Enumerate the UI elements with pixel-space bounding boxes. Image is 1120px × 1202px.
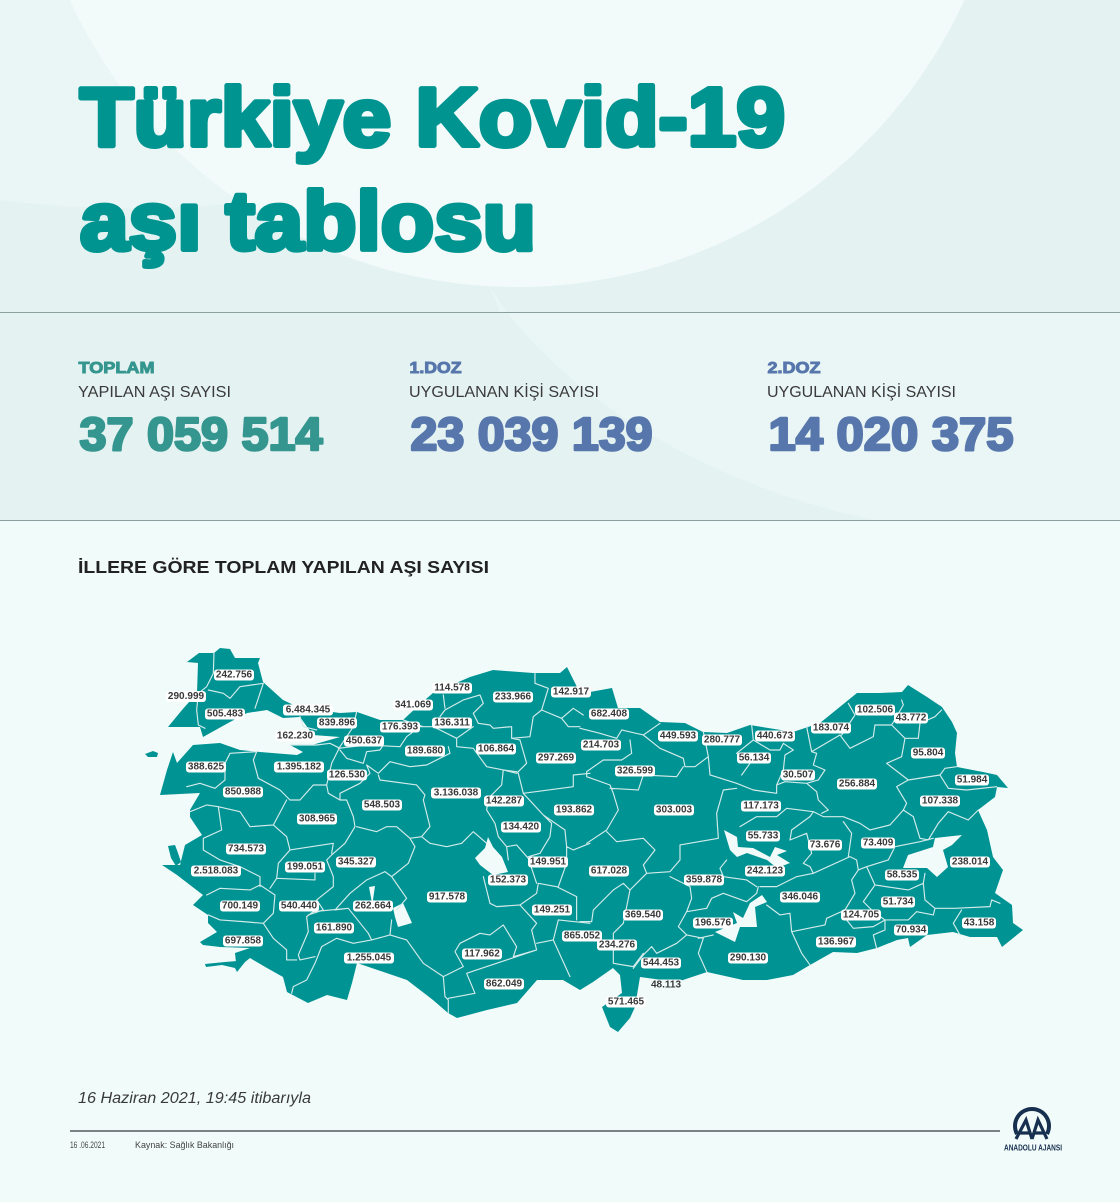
value: 114.578: 114.578 (434, 682, 470, 694)
stat: 1. doz (409, 360, 652, 460)
value: 280.777: 280.777 (704, 734, 741, 746)
value: 117.173: 117.173 (743, 800, 779, 812)
stat: 2. doz: UYGULANAN KİŞİ SAYISI (767, 383, 956, 401)
value: 117.962: 117.962 (464, 948, 500, 960)
value: 346.046: 346.046 (782, 892, 819, 902)
value: 571.465: 571.465 (608, 996, 645, 1008)
logo: Anadolu Ajansı (1004, 1107, 1062, 1152)
value: 55.733: 55.733 (748, 830, 779, 842)
divider: upper (0, 312, 1120, 313)
value: 369.540: 369.540 (625, 910, 662, 920)
value: 440.673: 440.673 (757, 730, 794, 742)
province value labels (166, 670, 996, 1008)
value: 2.518.083: 2.518.083 (194, 866, 239, 876)
lakes (369, 830, 962, 942)
value: 450.637: 450.637 (346, 736, 383, 746)
value: 149.251: 149.251 (534, 904, 571, 916)
map of Türkiye with provincial values (145, 648, 1023, 1032)
value: 617.028: 617.028 (591, 866, 628, 876)
value: 43.158: 43.158 (964, 918, 995, 928)
value: 238.014: 238.014 (952, 856, 989, 868)
map section heading: İLLERE GÖRE TOPLAM YAPILAN AŞI SAYISI (78, 557, 489, 577)
value: 548.503: 548.503 (364, 800, 401, 810)
province borders: east (580, 700, 1000, 972)
footer date and source: 16 .06.2021 (70, 1140, 105, 1150)
value: 297.269: 297.269 (538, 752, 575, 764)
header background (0, 0, 1120, 520)
value: 43.772: 43.772 (896, 712, 927, 724)
value: 152.373: 152.373 (490, 874, 527, 886)
date note: 16 Haziran 2021, 19:45 itibarıyla (78, 1090, 311, 1107)
title (78, 70, 785, 269)
value: 700.149: 700.149 (222, 900, 259, 912)
stat: toplam: TOPLAM (78, 360, 154, 377)
value: 196.576: 196.576 (695, 918, 732, 928)
value: 839.896: 839.896 (319, 718, 356, 728)
value: 134.420: 134.420 (503, 822, 540, 832)
value: 345.327: 345.327 (338, 856, 375, 868)
value: 1.255.045: 1.255.045 (347, 952, 392, 964)
value: 449.593: 449.593 (660, 730, 697, 742)
value: 697.858: 697.858 (225, 936, 262, 946)
footer date and source: Kaynak: Sağlık Bakanlığı (135, 1140, 234, 1150)
value: 58.535: 58.535 (887, 870, 918, 880)
stat: 1. doz: 23 039 139 (410, 408, 652, 460)
value: 256.884: 256.884 (839, 778, 876, 790)
value: 3.136.038: 3.136.038 (434, 788, 479, 798)
stat: 2. doz: 2.DOZ (768, 360, 821, 377)
stat: toplam (78, 360, 324, 460)
value: 359.878: 359.878 (686, 874, 723, 886)
value: 262.664: 262.664 (355, 900, 392, 912)
value: 6.484.345: 6.484.345 (286, 704, 331, 716)
value: 162.230: 162.230 (277, 730, 314, 742)
value: 303.003: 303.003 (656, 804, 693, 816)
value: 682.408: 682.408 (591, 708, 628, 720)
value: 124.705: 124.705 (843, 910, 880, 920)
value: 1.395.182: 1.395.182 (277, 762, 322, 772)
value: 30.507: 30.507 (783, 770, 814, 780)
divider: lower (0, 520, 1120, 521)
stat: toplam: YAPILAN AŞI SAYISI (78, 384, 231, 401)
value: 189.680: 189.680 (407, 746, 444, 756)
value: 73.409: 73.409 (863, 838, 894, 848)
value: 183.074: 183.074 (813, 722, 850, 734)
value: 540.440: 540.440 (281, 900, 318, 912)
value: 505.483: 505.483 (207, 708, 244, 720)
value: 865.052: 865.052 (564, 930, 601, 942)
value: 142.917: 142.917 (553, 686, 590, 698)
value: 242.756: 242.756 (216, 670, 253, 680)
value: 102.506: 102.506 (857, 704, 894, 716)
value: 70.934: 70.934 (896, 924, 927, 936)
value: 161.890: 161.890 (316, 922, 353, 934)
value: 917.578: 917.578 (429, 892, 466, 902)
value: 862.049: 862.049 (486, 978, 523, 990)
province borders: west (187, 653, 590, 1013)
value: 214.703: 214.703 (583, 740, 620, 750)
value: 51.984: 51.984 (957, 774, 988, 786)
value: 48.113: 48.113 (651, 980, 681, 990)
value: 136.311: 136.311 (434, 718, 470, 728)
value: 95.804: 95.804 (913, 748, 944, 758)
value: 290.130: 290.130 (730, 952, 767, 964)
value: 290.999: 290.999 (168, 691, 205, 702)
value: 107.338: 107.338 (922, 796, 959, 806)
value: 136.967: 136.967 (818, 936, 855, 948)
stat: 2. doz (767, 360, 1014, 460)
value: 734.573: 734.573 (228, 844, 265, 854)
value: 341.069: 341.069 (395, 700, 432, 710)
value: 242.123: 242.123 (747, 866, 784, 876)
value: 126.530: 126.530 (329, 770, 366, 780)
value: 73.676: 73.676 (810, 840, 841, 850)
value: 193.862: 193.862 (556, 804, 593, 816)
footer date and source (70, 1140, 234, 1150)
value: 544.453: 544.453 (643, 958, 680, 968)
value: 56.134: 56.134 (739, 752, 770, 764)
footer rule (70, 1130, 1000, 1132)
value: 149.951: 149.951 (530, 856, 567, 868)
stat: 2. doz: 14 020 375 (768, 408, 1014, 460)
stat: toplam: 37 059 514 (80, 408, 323, 460)
value: 234.276: 234.276 (599, 940, 636, 950)
stat: 1. doz: UYGULANAN KİŞİ SAYISI (409, 383, 599, 401)
title: aşı tablosu (80, 174, 536, 268)
value: 308.965: 308.965 (299, 814, 336, 824)
value: 51.734: 51.734 (883, 896, 914, 908)
value: 106.864: 106.864 (478, 744, 515, 754)
value: 176.393: 176.393 (382, 722, 419, 732)
value: 850.988: 850.988 (225, 786, 262, 798)
value: 233.966: 233.966 (495, 692, 532, 702)
title: Türkiye Kovid-19 (80, 70, 785, 164)
value: 142.287: 142.287 (486, 796, 523, 806)
value: 199.051: 199.051 (287, 862, 324, 872)
stat: 1. doz: 1.DOZ (410, 360, 462, 377)
value: 388.625: 388.625 (188, 762, 225, 772)
value: 326.599: 326.599 (617, 766, 654, 776)
country shape (145, 648, 1023, 1032)
